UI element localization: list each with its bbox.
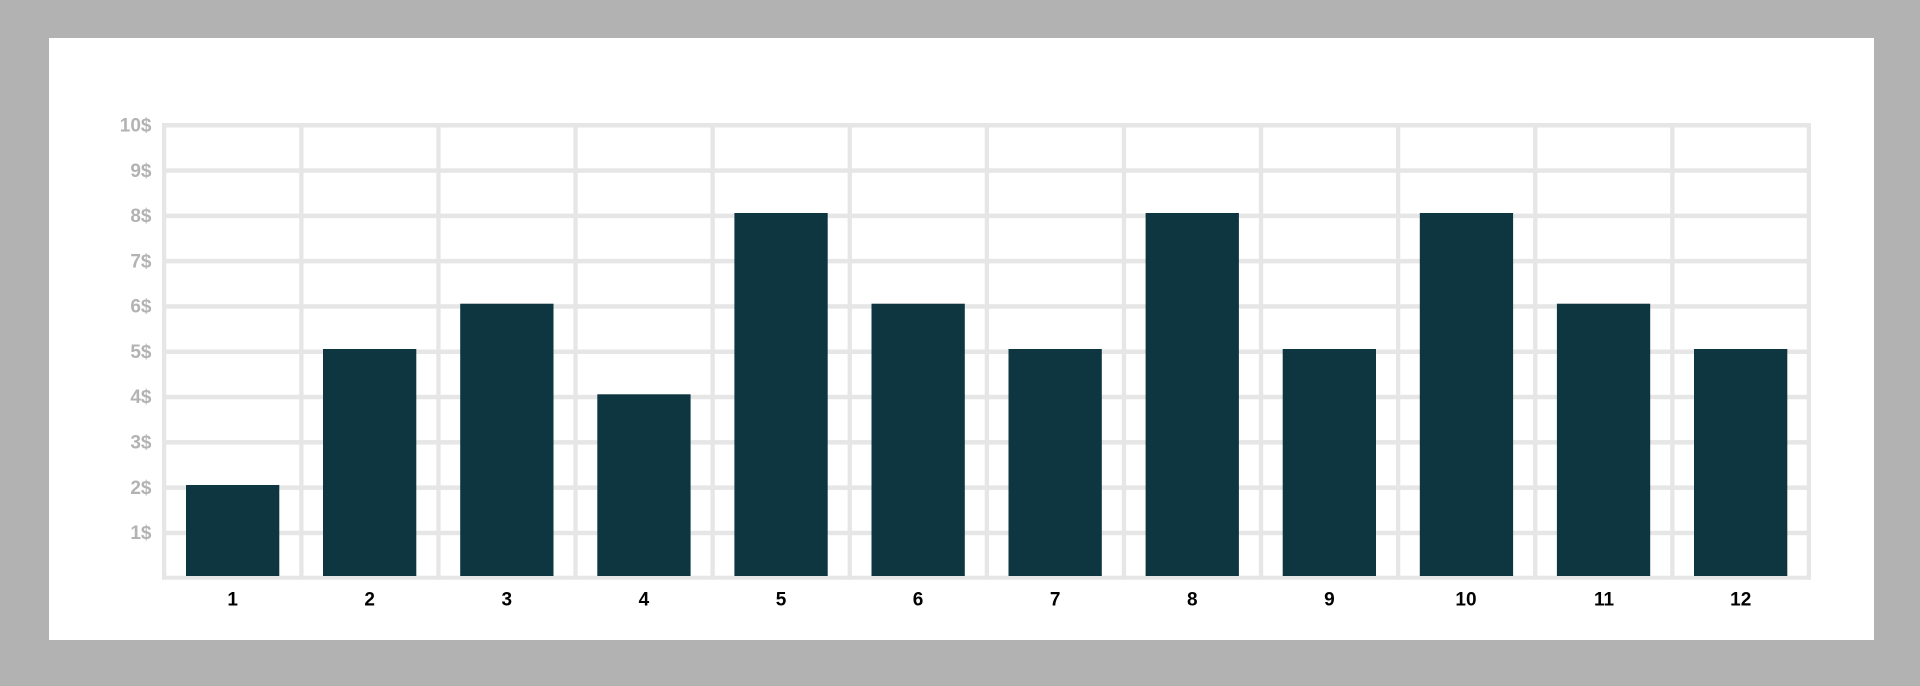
y-axis labels: 2$	[130, 478, 152, 499]
y-axis labels: 1$	[130, 523, 152, 544]
x-axis labels: 7	[1050, 590, 1060, 610]
x-axis labels: 2	[364, 590, 375, 610]
x-axis labels: 10	[1455, 590, 1477, 610]
x-axis labels: 9	[1324, 590, 1335, 610]
x-axis labels	[227, 590, 1751, 610]
y-axis labels: 5$	[130, 342, 152, 363]
y-axis labels: 10$	[120, 116, 152, 136]
x-axis labels: 5	[776, 590, 787, 610]
y-axis labels: 4$	[130, 387, 152, 408]
y-axis labels: 7$	[130, 251, 152, 272]
x-axis labels: 6	[913, 590, 923, 610]
y-axis labels: 3$	[130, 432, 152, 454]
y-axis labels: 9$	[130, 161, 152, 182]
x-axis labels: 1	[227, 590, 238, 610]
chart grid	[162, 123, 1811, 580]
y-axis labels: 8$	[130, 206, 152, 227]
bars	[186, 213, 1787, 576]
x-axis labels: 3	[502, 590, 512, 610]
x-axis labels: 8	[1187, 590, 1198, 610]
x-axis labels: 4	[639, 590, 650, 610]
x-axis labels: 12	[1730, 590, 1751, 610]
x-axis labels: 11	[1594, 590, 1614, 610]
y-axis labels	[120, 116, 152, 544]
y-axis labels: 6$	[130, 297, 152, 318]
